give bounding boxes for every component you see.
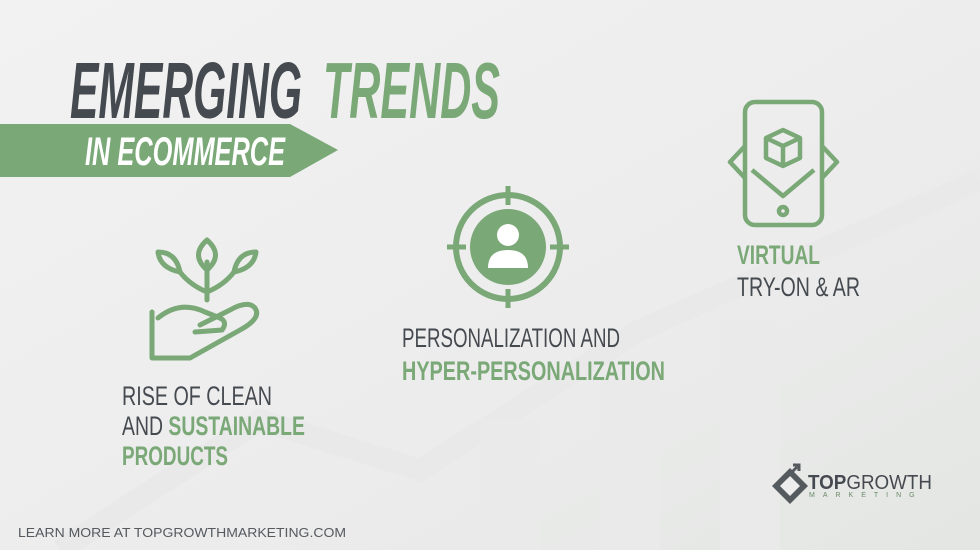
banner: in ecommerce: IN ECOMMERCE xyxy=(85,130,286,174)
logo: MARKETING xyxy=(809,492,923,499)
text: personalization: HYPER-PERSONALIZATION xyxy=(402,356,665,386)
footer: LEARN MORE AT TOPGROWTHMARKETING.COM xyxy=(18,526,346,540)
text: rise of clean: RISE OF CLEAN xyxy=(122,381,272,411)
text: virtual try-on: VIRTUAL xyxy=(737,240,820,270)
logo xyxy=(772,465,932,504)
text: rise of clean: PRODUCTS xyxy=(122,441,228,471)
icon: target person xyxy=(447,186,569,308)
icon: plant in hand xyxy=(152,240,257,358)
text: rise of clean: AND SUSTAINABLE xyxy=(122,411,305,441)
background faint chart xyxy=(60,180,980,550)
text: personalization xyxy=(402,323,665,386)
icon: phone AR xyxy=(730,102,837,225)
banner: in ecommerce xyxy=(0,124,338,177)
text: virtual try-on: TRY-ON & AR xyxy=(737,272,860,302)
logo: TOPGROWTH xyxy=(808,472,932,494)
text: virtual try-on xyxy=(737,240,860,302)
text: rise of clean xyxy=(122,381,305,471)
text: personalization: PERSONALIZATION AND xyxy=(402,323,620,353)
title: TRENDS xyxy=(323,46,500,135)
title: EMERGING xyxy=(70,46,302,135)
